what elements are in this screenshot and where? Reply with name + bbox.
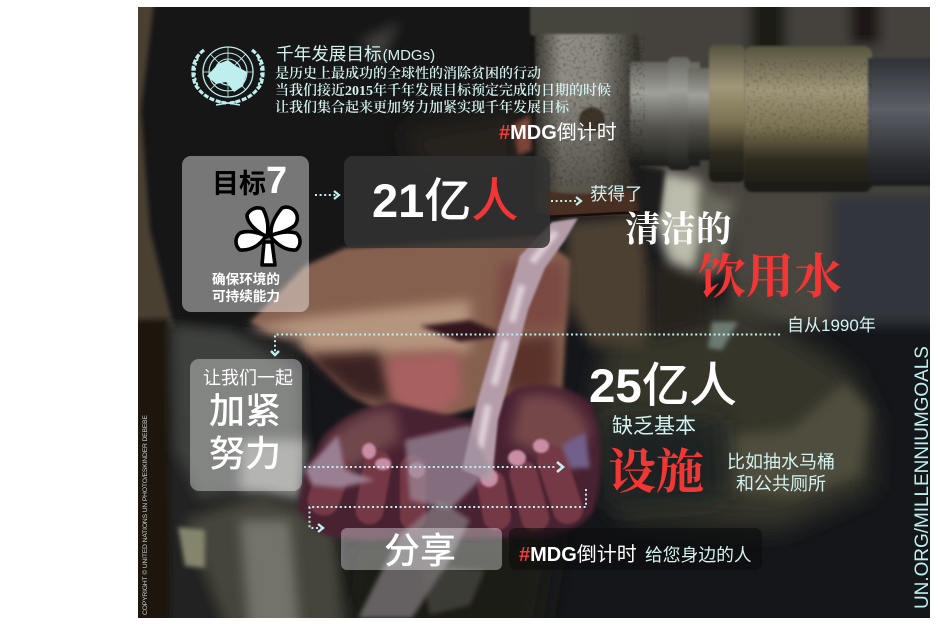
small call text: 让我们一起 bbox=[203, 368, 293, 388]
laurel wreath bbox=[193, 50, 263, 103]
panel: share button bbox=[341, 528, 502, 571]
text: such as toilets: 比如抽水马桶 bbox=[727, 452, 835, 472]
panel: 2.1 billion bbox=[344, 156, 550, 248]
hashtag text: #MDG倒计时 bbox=[519, 543, 637, 566]
big call text bbox=[209, 390, 281, 474]
share text: 分享 bbox=[384, 530, 456, 571]
photo credit: COPYRIGHT © UNITED NATIONS UN PHOTO/ESKINDER DEBEBE bbox=[141, 414, 149, 615]
stat 25亿人: 25亿人 bbox=[589, 360, 737, 413]
water pipe bbox=[530, 4, 938, 220]
intro heading: 千年发展目标(MDGs) bbox=[276, 44, 435, 64]
big call text: 努力 bbox=[209, 433, 281, 474]
text: lacking basic: 缺乏基本 bbox=[612, 415, 696, 438]
goal heading: 目标7 bbox=[212, 160, 287, 202]
arrow: goal to 21亿 bbox=[315, 191, 339, 199]
text: such as toilets bbox=[727, 452, 835, 494]
text: such as toilets: 和公共厕所 bbox=[736, 474, 826, 494]
face bbox=[245, 236, 570, 422]
UN emblem bbox=[193, 47, 263, 105]
intro lines: 让我们集合起来更加努力加紧实现千年发展目标 bbox=[275, 99, 570, 116]
water stream bbox=[358, 218, 578, 618]
text: obtained: 获得了 bbox=[590, 184, 642, 204]
intro text block bbox=[275, 44, 611, 116]
hashtag top: #MDG倒计时 bbox=[499, 121, 617, 144]
arrow: to 25亿 bbox=[304, 462, 563, 472]
text: since 1990: 自从1990年 bbox=[787, 316, 876, 335]
arrow: to obtained bbox=[551, 197, 581, 205]
background wall top right bbox=[620, 0, 938, 325]
collar left bbox=[130, 320, 360, 626]
panel: hashtag share bbox=[509, 528, 762, 570]
goal description bbox=[212, 271, 280, 304]
text: sanitation: 设施 bbox=[608, 446, 704, 499]
goal description: 可持续能力 bbox=[212, 288, 280, 304]
hair bbox=[138, 7, 526, 328]
clothing sleeve and cuff bbox=[330, 172, 875, 626]
arrow: dotted line down to call bbox=[271, 334, 780, 355]
goal description: 确保环境的 bbox=[212, 271, 280, 287]
intro lines bbox=[275, 65, 611, 116]
stat 21亿人: 21亿人 bbox=[372, 174, 518, 227]
panel: goal 7 bbox=[182, 156, 309, 312]
icon: clover plant bbox=[236, 207, 300, 265]
vertical url: UN.ORG/MILLENNIUMGOALS bbox=[912, 346, 933, 609]
intro lines: 是历史上最成功的全球性的消除贫困的行动 bbox=[275, 65, 541, 82]
text: drinking water: 饮用水 bbox=[698, 251, 842, 304]
text: clean: 清洁的 bbox=[625, 209, 732, 249]
arrow: to share bbox=[310, 489, 586, 532]
hands bbox=[298, 384, 601, 540]
intro lines: 当我们接近2015年千年发展目标预定完成的日期的时候 bbox=[275, 82, 611, 99]
panel: let us intensify bbox=[190, 359, 302, 491]
ear bbox=[513, 115, 532, 155]
big call text: 加紧 bbox=[209, 390, 281, 431]
share with people text: 给您身边的人 bbox=[645, 545, 752, 565]
